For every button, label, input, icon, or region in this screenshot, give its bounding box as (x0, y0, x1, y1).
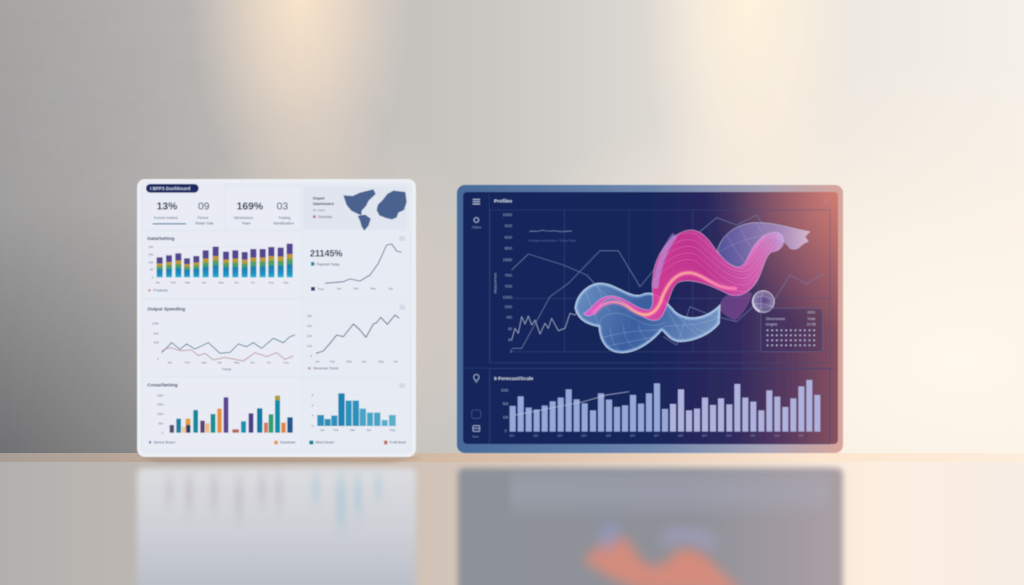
card: multi-line chart: 500 (154, 331, 159, 335)
card: histogram: 4 (312, 413, 314, 417)
card: stacked bar chart (143, 232, 300, 297)
card: grouped bar chart: 1500 (157, 402, 164, 406)
main chart with gridlines and axes: Measurement (494, 273, 498, 293)
data card with dot matrix: Engine (766, 323, 777, 327)
card: right line chart: May (378, 360, 384, 364)
card: growth line chart: Total (318, 287, 324, 291)
card: right line chart: Jan (315, 360, 320, 364)
stat: 03: 03 (277, 201, 288, 212)
card: histogram (303, 378, 409, 449)
bottom bar chart: 0 (505, 429, 507, 433)
panel: dark dashboard (457, 185, 843, 453)
main chart with gridlines and axes: 6500 (505, 246, 512, 250)
card: histogram: Feb (333, 428, 339, 432)
card: stacked bar chart: 50 (150, 268, 154, 272)
stat: 03: Trading (278, 216, 291, 220)
sidebar icons (472, 374, 481, 431)
card: world map: By region (313, 208, 326, 212)
bottom bar chart (463, 368, 837, 444)
card: grouped bar chart: Bonus Board (154, 441, 175, 445)
main chart with gridlines and axes: 60 (508, 338, 512, 342)
card: multi-line chart: Output Spending (147, 306, 185, 311)
card: growth line chart: Feb (353, 286, 359, 290)
sidebar and header: Filters (472, 225, 481, 229)
card: world map: Depot (313, 195, 325, 200)
bottom bar chart: Q02 (533, 434, 539, 438)
card: multi-line chart: Aug (283, 361, 289, 365)
stat: 13%: Funnel metrics (154, 216, 178, 220)
card: stacked bar chart: Data/Setting (147, 236, 175, 241)
card: grouped bar chart: 500 (158, 421, 164, 425)
card: right line chart: 100 (307, 344, 312, 348)
bottom bar chart: Q10 (726, 434, 732, 438)
sidebar and header: Profiles (494, 199, 513, 205)
card: growth line chart: Apr (388, 286, 393, 290)
bottom bar chart: 100 (503, 415, 508, 419)
back tube (717, 223, 810, 269)
bottom bar chart: Q09 (702, 434, 708, 438)
card: growth line chart: 21145% (310, 249, 342, 259)
card: grouped bar chart: 0 (162, 431, 164, 435)
card: histogram: Mixed Board (315, 441, 334, 445)
bottom bar chart: Q01 (509, 434, 515, 438)
title pill (146, 184, 199, 193)
bottom bar chart: Q13 (798, 434, 804, 438)
stat: 09: Period (198, 216, 208, 220)
card: grouped bar chart: Downtown (280, 441, 296, 445)
stat: 09: Retail Total (195, 222, 214, 226)
data card with dot matrix: Total (807, 317, 815, 321)
card: growth line chart (304, 232, 409, 297)
card: right line chart: 150 (307, 334, 312, 338)
card: stacked bar chart: 0 (152, 276, 154, 280)
bottom bar chart: Q06 (630, 434, 636, 438)
bottom bar chart: Q03 (557, 434, 563, 438)
card: right line chart (303, 301, 409, 375)
card: histogram: 8 (312, 393, 314, 397)
main chart with gridlines and axes: 7000 (505, 274, 512, 278)
card: right line chart: Jun (393, 360, 398, 364)
card: stacked bar chart: Jan (155, 280, 160, 284)
bottom bar chart: 500 (503, 402, 508, 406)
stat: 169%: 169% (237, 201, 263, 212)
main chart with gridlines and axes: 9100 (505, 224, 512, 228)
main chart with gridlines and axes: Average performance / Output Total (529, 238, 576, 242)
pink body (583, 220, 784, 320)
card: stacked bar chart: May (218, 280, 224, 284)
main chart with gridlines and axes: 10000 (503, 213, 512, 217)
main chart with gridlines and axes: 80 (508, 327, 512, 331)
bottom bar chart: 9 Forecast/Scale (494, 376, 534, 382)
card: multi-line chart (143, 301, 300, 375)
bottom bar chart: 1000 (501, 389, 508, 393)
stat: 09: 09 (198, 201, 210, 212)
card: growth line chart: Payment Today (317, 262, 340, 266)
map continents (343, 189, 407, 231)
card: right line chart: Mar (347, 360, 352, 364)
card: multi-line chart: Jul (267, 361, 271, 365)
card: stacked bar chart: Mar (185, 280, 190, 284)
card: right line chart: Feb (330, 360, 335, 364)
card: growth line chart: Jan (337, 286, 342, 290)
title pill: I BFFS Dashboard (150, 186, 191, 191)
main chart with gridlines and axes: 8100 (505, 235, 512, 239)
card: multi-line chart: 0 (157, 357, 159, 361)
main chart with gridlines and axes: 10080 (503, 258, 512, 262)
card: multi-line chart: Trend (222, 368, 231, 372)
card: right line chart: 300 (307, 314, 312, 318)
card: histogram: Profit Band (389, 441, 406, 445)
bubble (752, 291, 774, 313)
data card with dot matrix: 2001 (807, 310, 815, 314)
data card with dot matrix: 19 55 (807, 323, 816, 327)
stat: 13%: 13% (157, 201, 177, 212)
card: histogram: May (390, 428, 396, 432)
card: multi-line chart: Jun (250, 361, 255, 365)
card: right line chart: 200 (307, 324, 312, 328)
stacked bars (157, 244, 293, 277)
main chart with gridlines and axes: 0 (510, 350, 512, 354)
card: grouped bar chart: 2000 (157, 393, 164, 397)
card: histogram: Jan (320, 428, 325, 432)
panel: light dashboard (137, 179, 416, 457)
bars (510, 383, 668, 432)
card: world map (304, 187, 407, 231)
stat: 169%: Dimensions (234, 216, 253, 220)
bottom bar chart: Q04 (581, 434, 587, 438)
card: right line chart: Apr (362, 360, 366, 364)
bottom bar chart: Save (472, 434, 479, 438)
card: world map: Summary (318, 215, 333, 219)
card: multi-line chart: 200 (154, 341, 159, 345)
card: growth line chart: Mar (371, 286, 376, 290)
main chart with gridlines and axes: 1000 (505, 305, 512, 309)
stat: 169%: Team (242, 222, 251, 226)
card: stacked bar chart: Feb (171, 280, 176, 284)
card: stacked bar chart: Jun (234, 280, 239, 284)
card: stacked bar chart: 100 (148, 260, 154, 264)
card: multi-line chart: May (234, 361, 240, 365)
card: stacked bar chart: Aug (268, 280, 274, 284)
stat: 13% (153, 201, 186, 224)
card: multi-line chart: Jan (167, 361, 172, 365)
floor reflection: light panel (137, 468, 416, 585)
card: world map: Dashboard (313, 201, 334, 206)
card: grouped bar chart (143, 378, 300, 449)
bottom bar chart: Q08 (678, 434, 684, 438)
stat: 169% (234, 201, 263, 226)
card: histogram: 6 (312, 403, 314, 407)
bottom bar chart: Q11 (750, 434, 756, 438)
card: stacked bar chart: 200 (148, 245, 154, 249)
header row of statistics (143, 182, 300, 229)
card: histogram: 0 (312, 424, 314, 428)
card: histogram: Mar (350, 428, 355, 432)
card: grouped bar chart: 1000 (157, 412, 164, 416)
stat: 03: Identification (273, 222, 294, 226)
card: right line chart: 0 (310, 354, 312, 358)
stat: 03 (273, 201, 294, 226)
card: stacked bar chart: Jul (251, 280, 255, 284)
data card with dot matrix (761, 308, 823, 352)
card: multi-line chart: Mar (202, 361, 207, 365)
3D data wave (575, 220, 810, 353)
card: multi-line chart: Feb (185, 361, 190, 365)
card: multi-line chart: 1000 (152, 321, 159, 325)
card: grouped bar chart: Cross/Setting (147, 383, 178, 388)
main chart with gridlines and axes: 400 (506, 315, 512, 319)
card: stacked bar chart: 150 (148, 252, 154, 256)
reflective floor (0, 453, 1024, 585)
translucent tail (720, 292, 752, 320)
bottom bar chart: Q05 (606, 434, 612, 438)
background wall (0, 0, 1024, 453)
bottom bar chart: Q07 (654, 434, 660, 438)
card: multi-line chart: Apr (217, 361, 222, 365)
card: stacked bar chart: Sep (283, 280, 289, 284)
card: right line chart: Revenue Trend (313, 367, 338, 371)
blue ribbon (575, 283, 720, 353)
sidebar and header (472, 193, 829, 364)
card: histogram: Apr (367, 428, 371, 432)
main chart with gridlines and axes: 7000 (505, 285, 512, 289)
main chart with gridlines and axes: 12000 (503, 296, 512, 300)
card: stacked bar chart: Products (153, 289, 168, 293)
floor reflection: dark panel (458, 468, 843, 585)
bottom bar chart: Q12 (774, 434, 780, 438)
card: stacked bar chart: Apr (202, 280, 206, 284)
data card with dot matrix: Dimensions (766, 317, 785, 321)
stat: 09 (195, 201, 214, 226)
main chart with gridlines and axes (490, 210, 830, 363)
